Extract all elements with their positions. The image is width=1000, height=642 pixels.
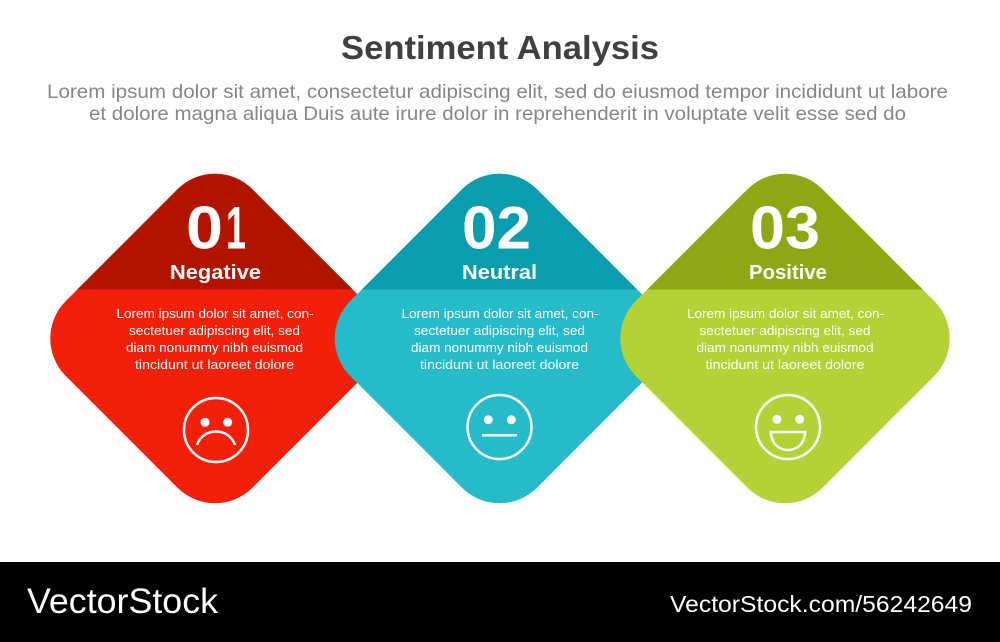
title: Sentiment Analysis — [341, 29, 659, 66]
description text: tincidunt ut laoreet dolore — [135, 357, 294, 372]
description text: tincidunt ut laoreet dolore — [706, 357, 864, 372]
description text: tincidunt ut laoreet dolore — [420, 357, 579, 372]
icon: neutral face — [468, 395, 532, 459]
number 01 — [186, 194, 246, 262]
subtitle text: Lorem ipsum dolor sit amet, consectetur adipiscing elit, sed do eiusmod tempor incididunt ut labore — [47, 81, 948, 103]
description text — [116, 306, 314, 372]
diamond: neutral body — [313, 152, 686, 525]
panel: positive — [620, 174, 950, 504]
number 01: 0 — [186, 194, 223, 262]
description text: diam nonummy nibh euismod — [696, 340, 874, 355]
diamond: negative body — [28, 152, 402, 525]
footer url text: VectorStock.com/56242649 — [670, 591, 972, 617]
description text: sectetuer adipiscing elit, sed — [414, 323, 585, 338]
description text: Lorem ipsum dolor sit amet, con- — [402, 306, 598, 321]
description text — [687, 306, 884, 372]
description text: Lorem ipsum dolor sit amet, con- — [116, 306, 314, 321]
description text — [402, 306, 598, 372]
panel: neutral — [334, 174, 642, 504]
description text: diam nonummy nibh euismod — [126, 340, 303, 355]
number 03: 03 — [750, 194, 820, 262]
diamond: neutral header — [362, 174, 637, 290]
diamond: negative header — [77, 174, 353, 290]
footer bar — [0, 562, 1000, 642]
description text: Lorem ipsum dolor sit amet, con- — [687, 306, 884, 321]
description text: diam nonummy nibh euismod — [411, 340, 588, 355]
icon: sad face — [184, 398, 248, 462]
panel: negative — [50, 174, 358, 504]
label: negative: Negative — [170, 262, 261, 284]
subtitle text: et dolore magna aliqua Duis aute irure dolor in reprehenderit in voluptate velit esse sed do — [89, 103, 906, 125]
diamond: positive body — [598, 152, 972, 525]
description text: sectetuer adipiscing elit, sed — [700, 323, 870, 338]
number 02: 02 — [462, 194, 531, 262]
footer logo text: VectorStock — [27, 582, 219, 621]
number 01: 1 — [226, 194, 246, 262]
icon: happy face — [756, 395, 820, 459]
description text: sectetuer adipiscing elit, sed — [129, 323, 300, 338]
diamond: positive header — [647, 174, 923, 290]
label: positive: Positive — [749, 262, 827, 284]
subtitle text — [47, 81, 948, 125]
label: neutral: Neutral — [462, 262, 537, 284]
